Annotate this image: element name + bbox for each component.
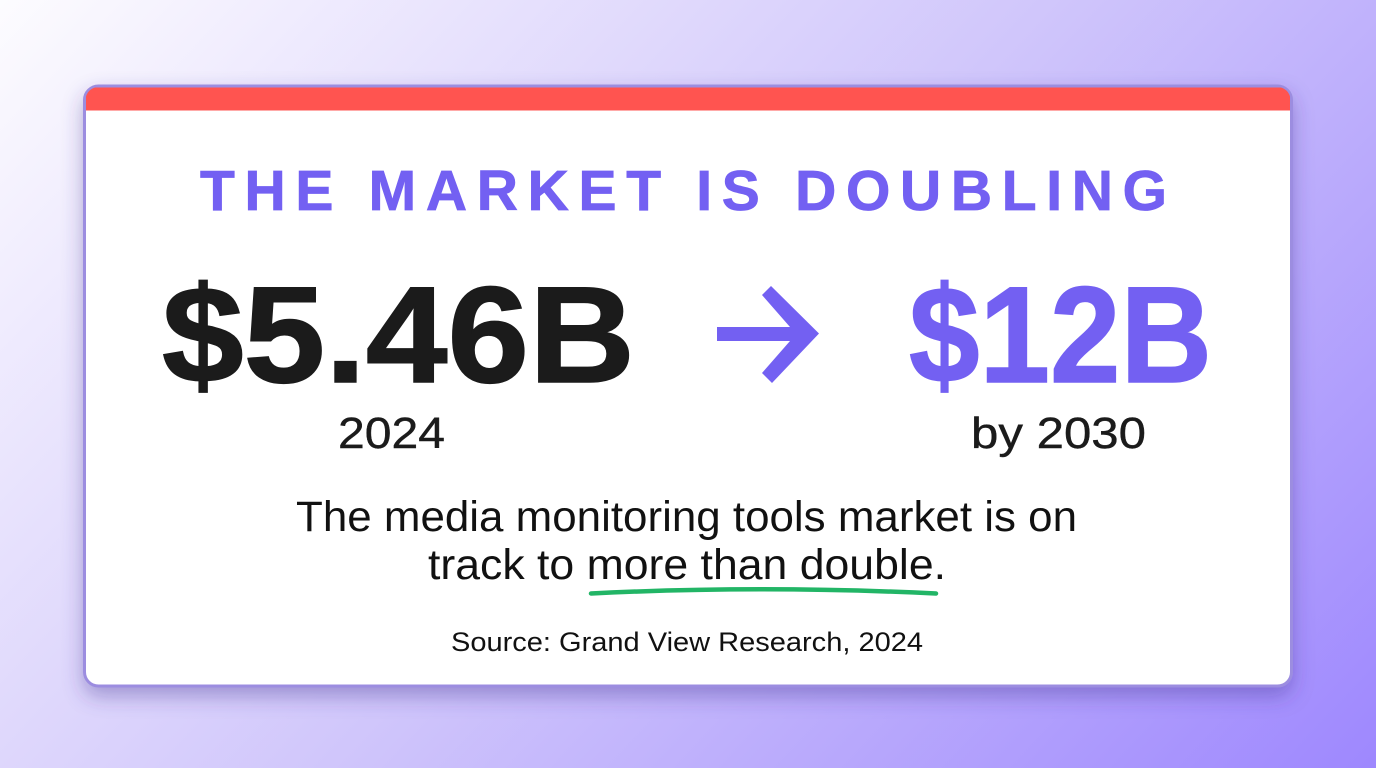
stat: 2024 value: $5.46B xyxy=(162,259,635,412)
body text: track to more than double. xyxy=(428,541,946,589)
body text: The media monitoring tools market is on xyxy=(296,493,1077,541)
panel: market card xyxy=(84,86,1292,686)
green underline xyxy=(591,589,936,594)
card body xyxy=(84,86,1292,686)
arrow xyxy=(717,286,819,383)
body text xyxy=(296,493,1077,589)
heading: THE MARKET IS DOUBLING xyxy=(200,159,1167,223)
stat: 2030 value: $12B xyxy=(909,259,1212,412)
source: Source: Grand View Research, 2024 xyxy=(451,627,923,657)
label: 2024: 2024 xyxy=(338,409,445,458)
label: by 2030: by 2030 xyxy=(971,409,1146,458)
red top bar xyxy=(86,88,1290,110)
